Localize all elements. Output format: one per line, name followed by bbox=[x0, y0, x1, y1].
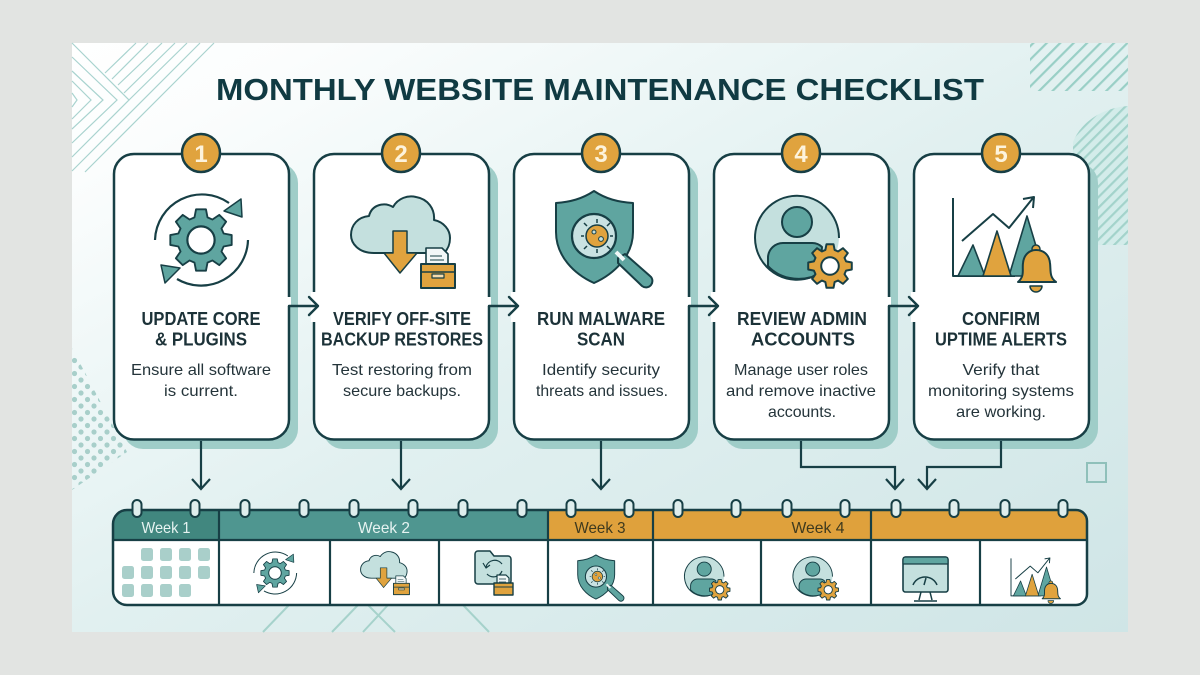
icon: small gear bbox=[254, 552, 297, 594]
panel: step 2 verify backups: VERIFY OFF-SITE bbox=[333, 309, 471, 329]
panel: step 5 confirm uptime alerts: UPTIME ALERTS bbox=[935, 330, 1067, 350]
week labels: Week 2 bbox=[358, 520, 410, 537]
panel: step 4 review admin accounts: REVIEW ADMIN bbox=[737, 309, 867, 329]
arrow: step 4 to step 5 bbox=[887, 292, 918, 322]
panel: step 4 review admin accounts: ACCOUNTS bbox=[751, 330, 855, 350]
panel: step 2 verify backups: Test restoring from bbox=[332, 362, 472, 379]
icon: small admin 1 bbox=[684, 556, 730, 600]
icon: small folder restore bbox=[475, 551, 513, 595]
panel: step 1 update core and plugins: UPDATE CORE bbox=[142, 309, 260, 329]
panel: step 3 run malware scan: RUN MALWARE bbox=[537, 309, 665, 329]
icon: small admin 2 bbox=[793, 556, 838, 600]
icon: monitor gauge bbox=[903, 557, 948, 601]
week labels: Week 4 bbox=[792, 520, 845, 537]
panel: step 1 update core and plugins: & PLUGINS bbox=[155, 330, 247, 350]
panel: step 2 verify backups: 2 bbox=[394, 141, 408, 168]
panel: step 5 confirm uptime alerts: monitoring systems bbox=[928, 383, 1074, 400]
decoration: bottom lines bbox=[263, 605, 489, 632]
background panel bbox=[72, 43, 1128, 632]
panel: step 3 run malware scan: Identify security bbox=[542, 362, 660, 379]
calendar rings bbox=[132, 500, 1068, 517]
arrow: step 1 to week 1 bbox=[192, 441, 210, 489]
panel: step 3 run malware scan: SCAN bbox=[577, 330, 625, 350]
decoration: top-right stripes bbox=[1030, 43, 1128, 91]
icon: small cloud backup bbox=[361, 552, 409, 595]
arrow: step 2 to step 3 bbox=[487, 292, 518, 322]
title: MONTHLY WEBSITE MAINTENANCE CHECKLIST bbox=[216, 72, 984, 107]
decoration: top-left chevron lines bbox=[72, 43, 214, 172]
calendar body and header fills bbox=[113, 510, 1088, 605]
arrow: step 3 to week 3 bbox=[592, 441, 610, 489]
panel: step 3 run malware scan: threats and issues. bbox=[536, 383, 668, 400]
week labels: Week 3 bbox=[574, 520, 626, 537]
icon: week 1 calendar dots bbox=[122, 548, 210, 597]
panel: step 5 confirm uptime alerts: 5 bbox=[994, 141, 1008, 168]
decoration: right stripes bbox=[1073, 106, 1128, 245]
panel: step 2 verify backups: BACKUP RESTORES bbox=[321, 330, 483, 350]
panel: step 4 review admin accounts: accounts. bbox=[768, 404, 836, 421]
icon: small shield bbox=[578, 555, 624, 601]
panel: step 3 run malware scan bbox=[514, 134, 698, 449]
panel: step 3 run malware scan: 3 bbox=[594, 141, 608, 168]
decoration: small square bbox=[1087, 463, 1106, 482]
panel: step 2 verify backups: secure backups. bbox=[343, 383, 461, 400]
panel: step 4 review admin accounts: Manage user roles bbox=[734, 362, 868, 379]
panel: step 4 review admin accounts: and remove inactive bbox=[726, 383, 876, 400]
panel: step 5 confirm uptime alerts bbox=[914, 134, 1098, 449]
calendar outline bbox=[113, 510, 1087, 605]
calendar strip bbox=[113, 500, 1088, 605]
panel: step 1 update core and plugins: is current. bbox=[164, 383, 238, 400]
panel: step 1 update core and plugins bbox=[114, 134, 298, 449]
arrow: step 1 to step 2 bbox=[287, 292, 318, 322]
panel: step 5 confirm uptime alerts: Verify that bbox=[962, 362, 1040, 379]
week labels bbox=[142, 520, 845, 537]
arrow: step 2 to week 2 bbox=[392, 441, 410, 489]
arrow: step 3 to step 4 bbox=[687, 292, 718, 322]
panel: step 4 review admin accounts bbox=[714, 134, 898, 449]
panel: step 1 update core and plugins: Ensure all software bbox=[131, 362, 271, 379]
arrow: step 4 to week 4 bbox=[801, 441, 904, 489]
icon: small chart with bell bbox=[1011, 558, 1060, 604]
arrow: step 5 to week 4 bbox=[918, 441, 1001, 489]
week labels: Week 1 bbox=[142, 520, 191, 537]
panel: step 4 review admin accounts: 4 bbox=[794, 141, 808, 168]
panel: step 1 update core and plugins: 1 bbox=[194, 141, 208, 168]
panel: step 2 verify backups bbox=[314, 134, 498, 449]
panel: step 5 confirm uptime alerts: are working. bbox=[956, 404, 1046, 421]
panel: step 5 confirm uptime alerts: CONFIRM bbox=[962, 309, 1040, 329]
decoration: left dot pattern bbox=[72, 348, 127, 490]
